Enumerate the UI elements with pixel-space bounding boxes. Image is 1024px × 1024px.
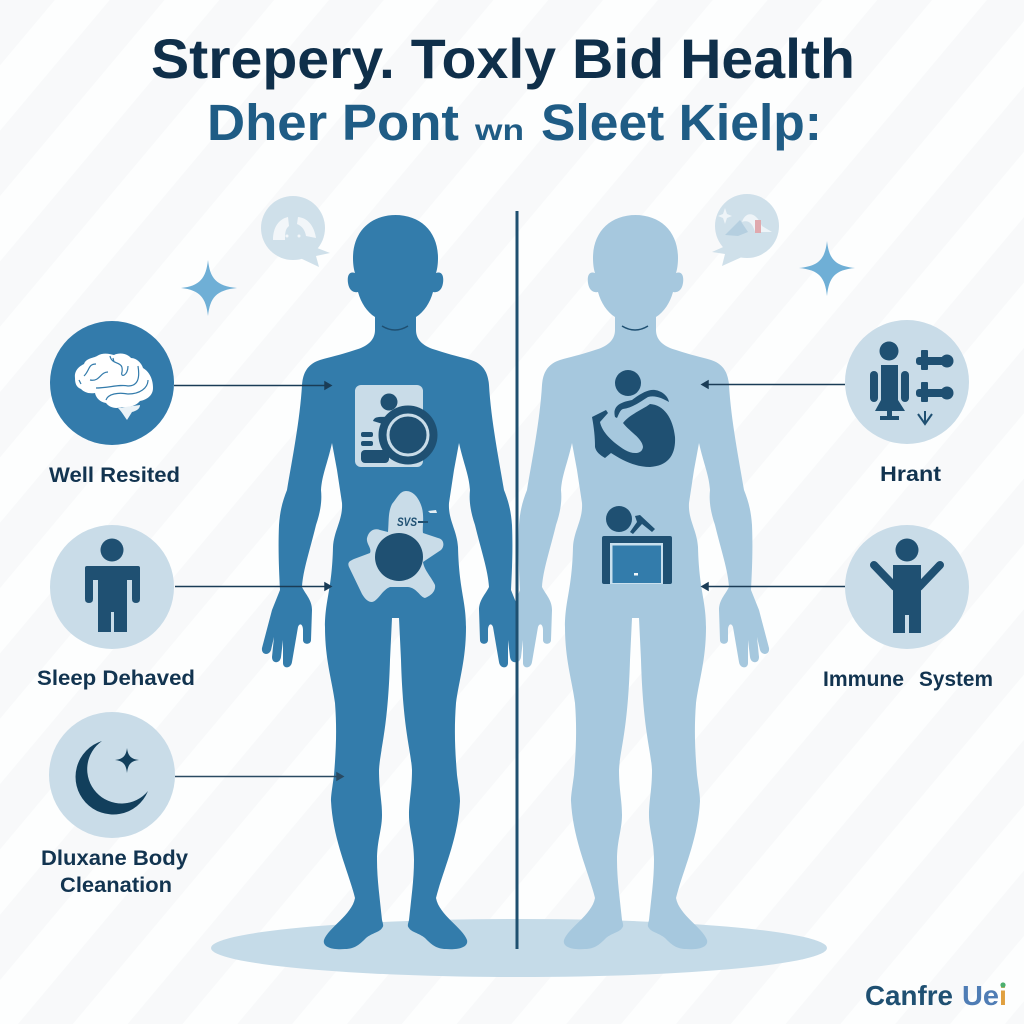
logo: Ue bbox=[962, 980, 999, 1011]
logo: i bbox=[999, 980, 1007, 1011]
logo: Canfre bbox=[865, 980, 953, 1011]
chest icon right bbox=[592, 370, 675, 467]
label: immune system: Immune bbox=[823, 668, 904, 691]
title: Sleet Kielp: bbox=[541, 94, 822, 151]
chest icon left bbox=[355, 385, 438, 467]
title: Strepery. Toxly Bid Health bbox=[151, 27, 855, 90]
belly icon left bbox=[348, 491, 443, 602]
arrow: moon to legs bbox=[175, 773, 343, 780]
icon circle: brain bbox=[50, 321, 174, 445]
speech bubble left bbox=[261, 196, 330, 267]
label: hrant: Hrant bbox=[880, 463, 941, 486]
label: immune system: System bbox=[919, 668, 993, 691]
sparkle right bbox=[799, 241, 855, 296]
left figure: rested body bbox=[262, 215, 529, 949]
right figure: deprived body bbox=[502, 215, 769, 949]
arrow: tools to chest bbox=[702, 381, 845, 388]
title: Dher Pont bbox=[207, 94, 459, 151]
arrow: raised person to abdomen bbox=[702, 583, 845, 590]
arrow: brain to chest bbox=[174, 382, 331, 389]
label: body cleanation: Dluxane Body bbox=[41, 847, 188, 870]
icon circle: standing person bbox=[50, 525, 174, 649]
label: well resited: Well Resited bbox=[49, 464, 180, 487]
label: sleep dehaved: Sleep Dehaved bbox=[37, 667, 195, 690]
belly icon left: SVS bbox=[397, 515, 417, 529]
speech bubble right bbox=[712, 194, 779, 266]
icon circle: figure with tools bbox=[845, 320, 969, 444]
icon circle: moon and star bbox=[49, 712, 175, 838]
arrow: person to abdomen bbox=[175, 583, 331, 590]
central divider bbox=[516, 211, 518, 949]
sparkle left bbox=[181, 260, 237, 316]
logo bbox=[865, 980, 1007, 1011]
belly icon right bbox=[602, 506, 672, 584]
label: body cleanation: Cleanation bbox=[60, 874, 172, 897]
label: body cleanation bbox=[41, 847, 188, 897]
icon circle: arms raised person bbox=[845, 525, 969, 649]
label: immune system bbox=[823, 668, 993, 691]
ground ellipse bbox=[211, 919, 827, 977]
title bbox=[151, 27, 855, 151]
title: wn bbox=[474, 114, 524, 147]
